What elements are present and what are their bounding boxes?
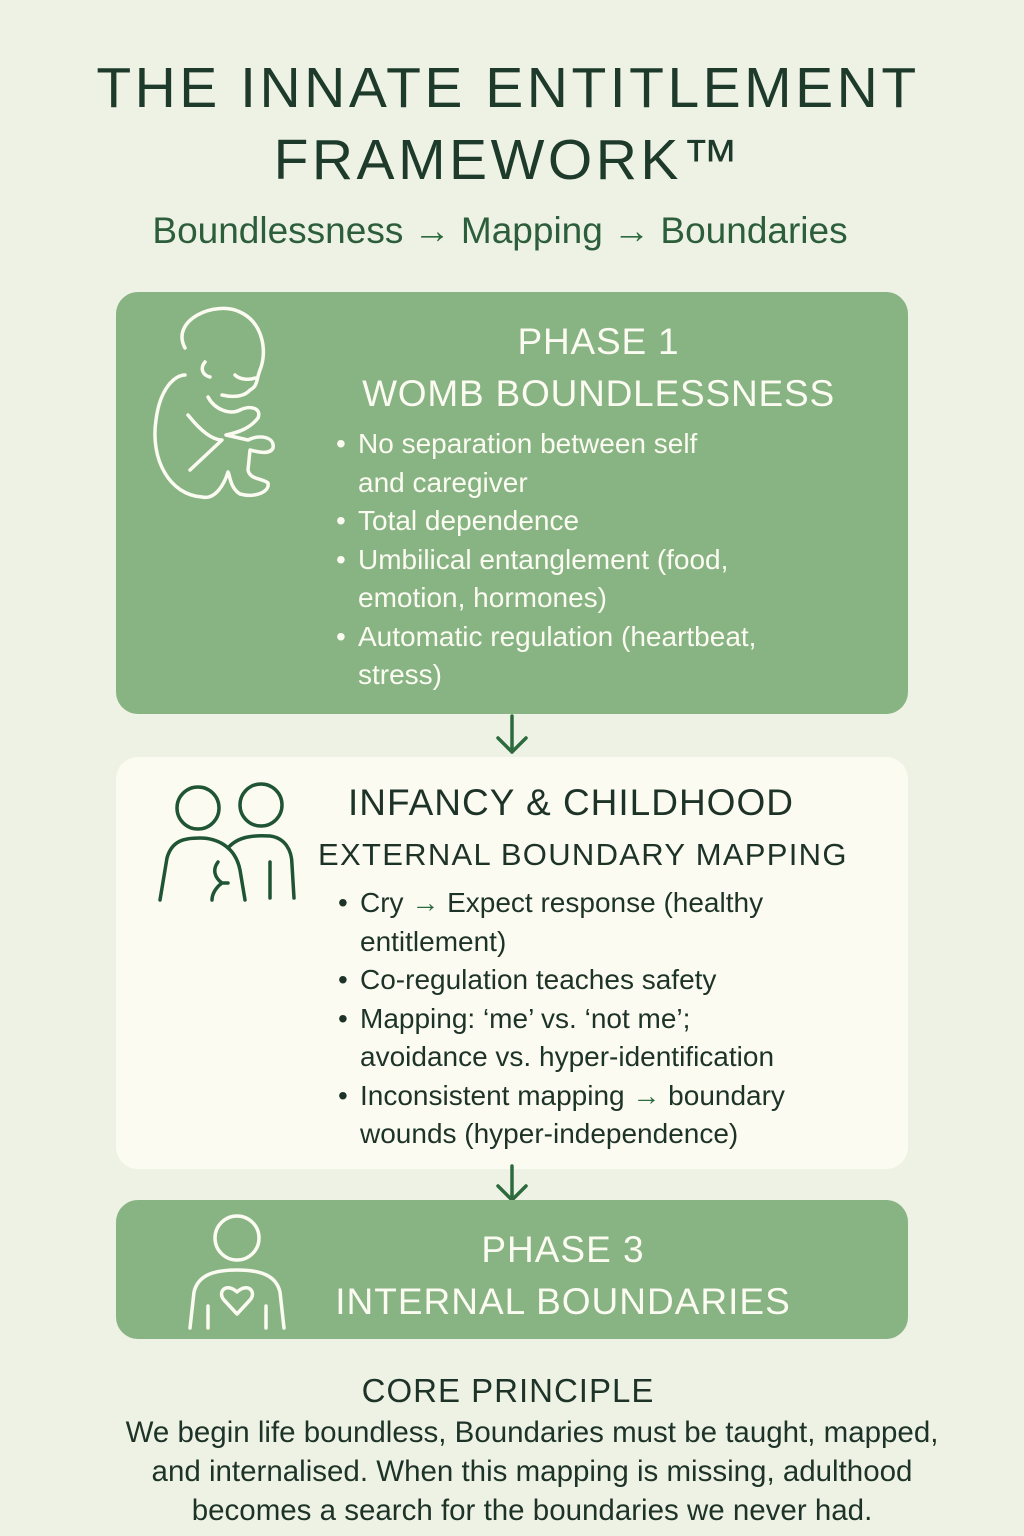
arrow: phase 1 to 2 bbox=[496, 714, 528, 754]
core principle text bbox=[126, 1416, 938, 1527]
core principle heading: CORE PRINCIPLE bbox=[362, 1372, 654, 1409]
icon: fetus bbox=[153, 306, 275, 500]
core principle text: becomes a search for the boundaries we never had. bbox=[192, 1494, 872, 1527]
panel: infancy bbox=[116, 757, 908, 1169]
heading: infancy: INFANCY & CHILDHOOD bbox=[348, 782, 794, 823]
heading: phase 3: PHASE 3 bbox=[481, 1229, 645, 1270]
bullet list: phase 1: Umbilical entanglement (food, bbox=[358, 544, 728, 574]
bullet list: infancy: Co-regulation teaches safety bbox=[360, 964, 716, 995]
heading: phase 1: WOMB BOUNDLESSNESS bbox=[362, 373, 835, 414]
bullet list: infancy: Inconsistent mapping → boundary bbox=[360, 1080, 785, 1110]
icon: two people bbox=[158, 782, 296, 902]
bullet list: phase 1: Automatic regulation (heartbeat, bbox=[358, 620, 756, 652]
subtitle: Boundlessness → Mapping → Boundaries bbox=[152, 210, 848, 251]
bullet list: phase 1: No separation between self bbox=[358, 428, 697, 459]
icon: person with heart bbox=[188, 1214, 286, 1330]
bullet list: phase 1 bbox=[337, 428, 756, 690]
title bbox=[96, 56, 920, 192]
bullet list: phase 1: and caregiver bbox=[358, 466, 528, 498]
bullet list: infancy: entitlement) bbox=[360, 926, 506, 956]
title: FRAMEWORK™ bbox=[274, 128, 742, 192]
bullet list: phase 1: Total dependence bbox=[358, 505, 579, 536]
heading: phase 3 bbox=[335, 1229, 791, 1322]
bullet list: phase 1: stress) bbox=[358, 659, 442, 690]
bullet list: phase 1: emotion, hormones) bbox=[358, 582, 607, 613]
bullet list: infancy: wounds (hyper-independence) bbox=[360, 1118, 738, 1149]
core principle text: and internalised. When this mapping is missing, adulthood bbox=[152, 1455, 912, 1488]
panel: phase 1 bbox=[116, 292, 908, 714]
heading: phase 3: INTERNAL BOUNDARIES bbox=[335, 1281, 791, 1322]
bullet list: infancy: Mapping: ‘me’ vs. ‘not me’; bbox=[360, 1002, 690, 1034]
bullet list: infancy: Cry → Expect response (healthy bbox=[360, 887, 763, 918]
subheading: EXTERNAL BOUNDARY MAPPING bbox=[318, 837, 848, 872]
heading: phase 1: PHASE 1 bbox=[518, 321, 679, 362]
core principle text: We begin life boundless, Boundaries must be taught, mapped, bbox=[126, 1416, 938, 1449]
bullet list: infancy: avoidance vs. hyper-identification bbox=[360, 1041, 774, 1072]
title: THE INNATE ENTITLEMENT bbox=[96, 56, 920, 120]
heading: phase 1 bbox=[362, 321, 835, 414]
bullet list: infancy bbox=[339, 887, 785, 1149]
panel: phase 3 bbox=[116, 1200, 908, 1339]
arrow: 2 to 3 bbox=[496, 1164, 528, 1200]
